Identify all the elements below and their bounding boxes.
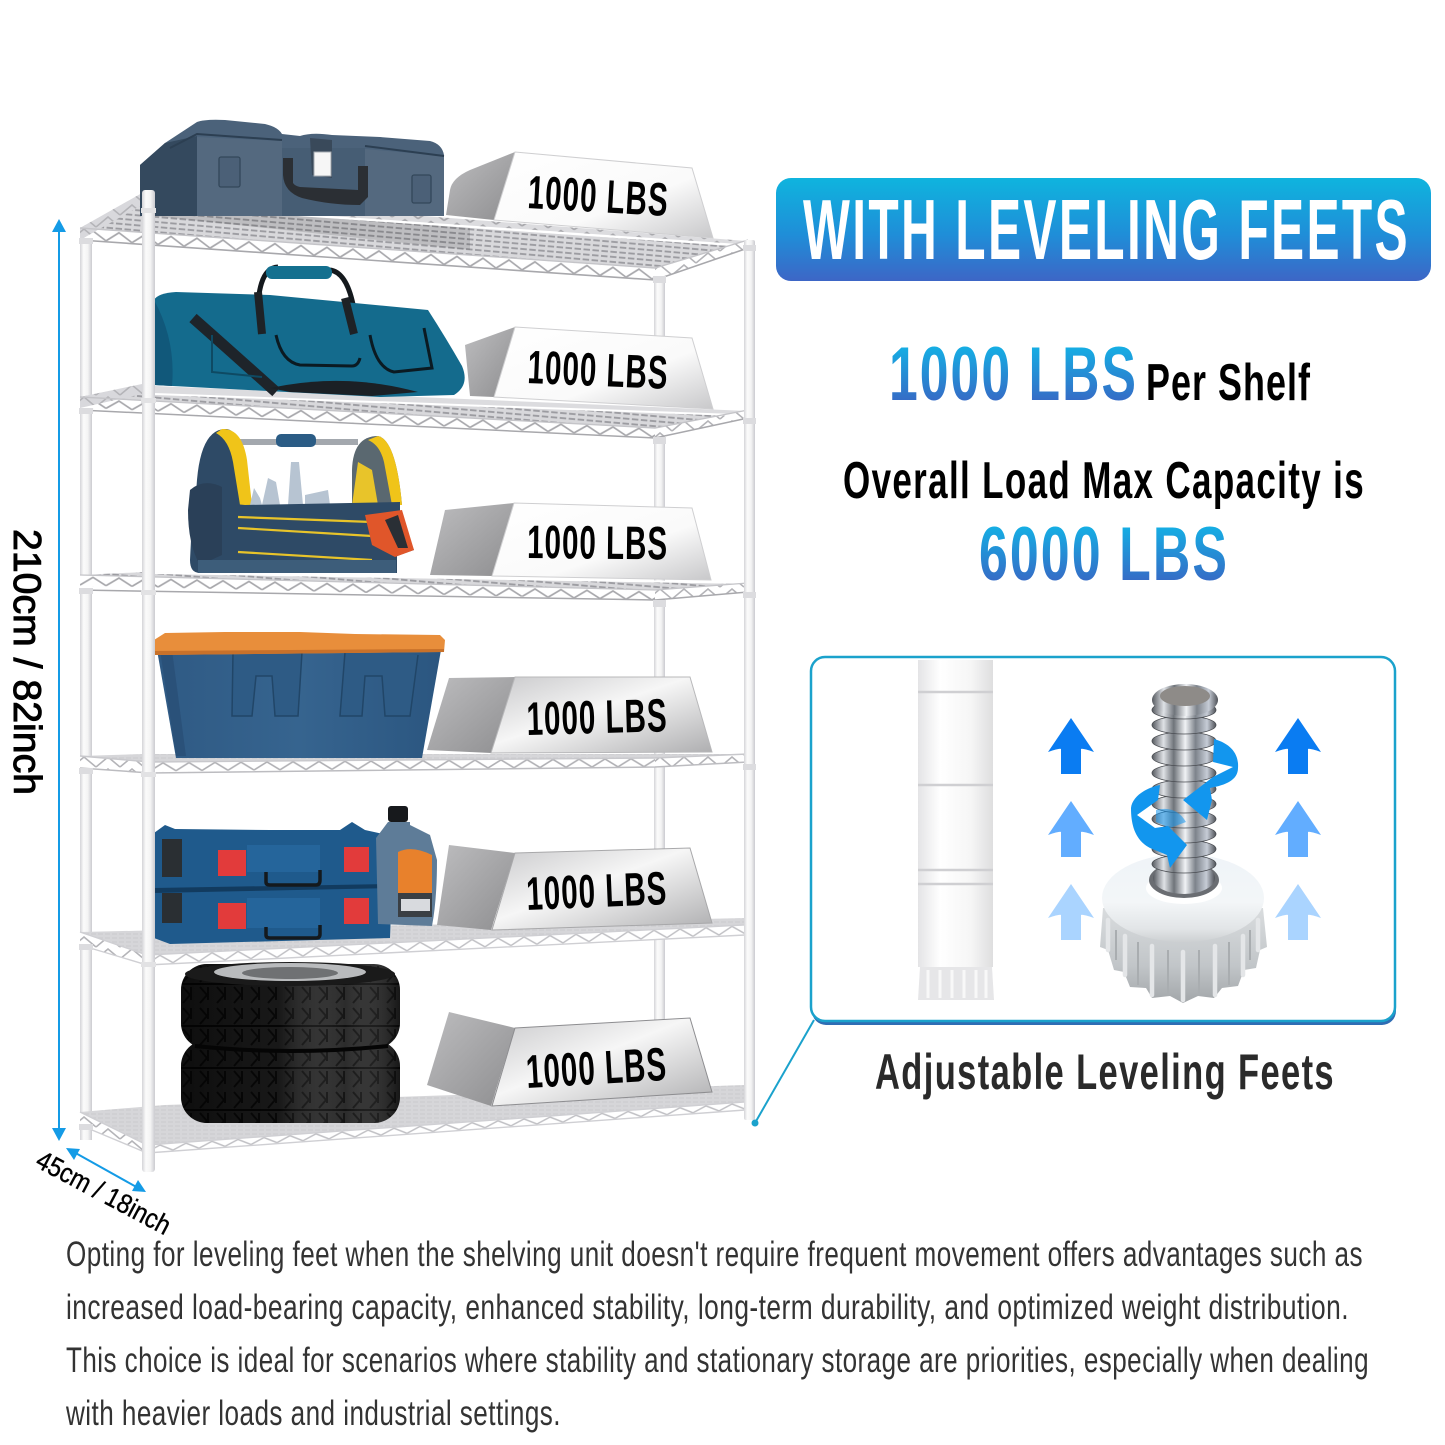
item: tool tote — [188, 429, 414, 573]
knob skirt — [1100, 908, 1267, 1003]
load block 6: 1000 LBS — [525, 1037, 668, 1098]
shelf post closeup — [918, 660, 994, 1000]
shelf 4 — [80, 754, 748, 773]
rotation arrows — [1131, 739, 1238, 868]
total capacity: 6000 LBS — [979, 512, 1229, 597]
depth label: 45cm / 18inch — [31, 1145, 176, 1241]
item: storage bin — [154, 632, 445, 758]
load block 5 — [437, 845, 712, 930]
load block 4 — [427, 677, 712, 753]
description paragraph — [65, 1235, 1369, 1433]
load per shelf: 1000 LBS — [889, 332, 1138, 417]
rear posts — [80, 235, 665, 1140]
banner — [776, 178, 1431, 281]
load block 6 — [427, 1012, 712, 1106]
item: duffel bag — [154, 266, 465, 397]
item: stacked tires — [181, 962, 400, 1123]
load block 3: 1000 LBS — [527, 515, 668, 569]
load per shelf: Per Shelf — [1146, 354, 1311, 412]
shelf 6 — [80, 1085, 745, 1153]
arrows up right — [1275, 718, 1321, 940]
leveling foot — [1100, 684, 1267, 1003]
load block 4: 1000 LBS — [526, 688, 668, 745]
description paragraph: with heavier loads and industrial settings. — [65, 1394, 561, 1433]
load block 3 — [430, 503, 711, 580]
height dimension arrow — [52, 219, 66, 1141]
item: toolbox — [140, 120, 444, 216]
shelf 2 — [80, 384, 748, 438]
shelf 5 — [80, 918, 748, 965]
bolt threads — [1152, 701, 1216, 873]
knob dome — [1102, 854, 1264, 942]
bolt head — [1152, 684, 1218, 716]
load block 1 — [446, 152, 713, 238]
panel: leveling feet detail — [811, 657, 1396, 1025]
shelf 3 — [80, 572, 748, 600]
load block 2 — [465, 327, 713, 409]
item: oil bottle — [376, 806, 437, 926]
front posts and collars — [79, 190, 756, 1172]
callout line to foot — [752, 1020, 814, 1126]
depth dimension arrow — [66, 1148, 146, 1192]
height label: 210cm / 82inch — [5, 529, 48, 795]
load block 1: 1000 LBS — [526, 165, 670, 226]
load block 2: 1000 LBS — [527, 340, 670, 399]
arrows up left — [1048, 718, 1094, 940]
bolt neck — [1149, 862, 1219, 898]
item: tool cases — [154, 822, 392, 944]
shelving unit — [79, 120, 756, 1172]
load block 5: 1000 LBS — [525, 861, 668, 920]
shelf 1 — [80, 193, 748, 280]
